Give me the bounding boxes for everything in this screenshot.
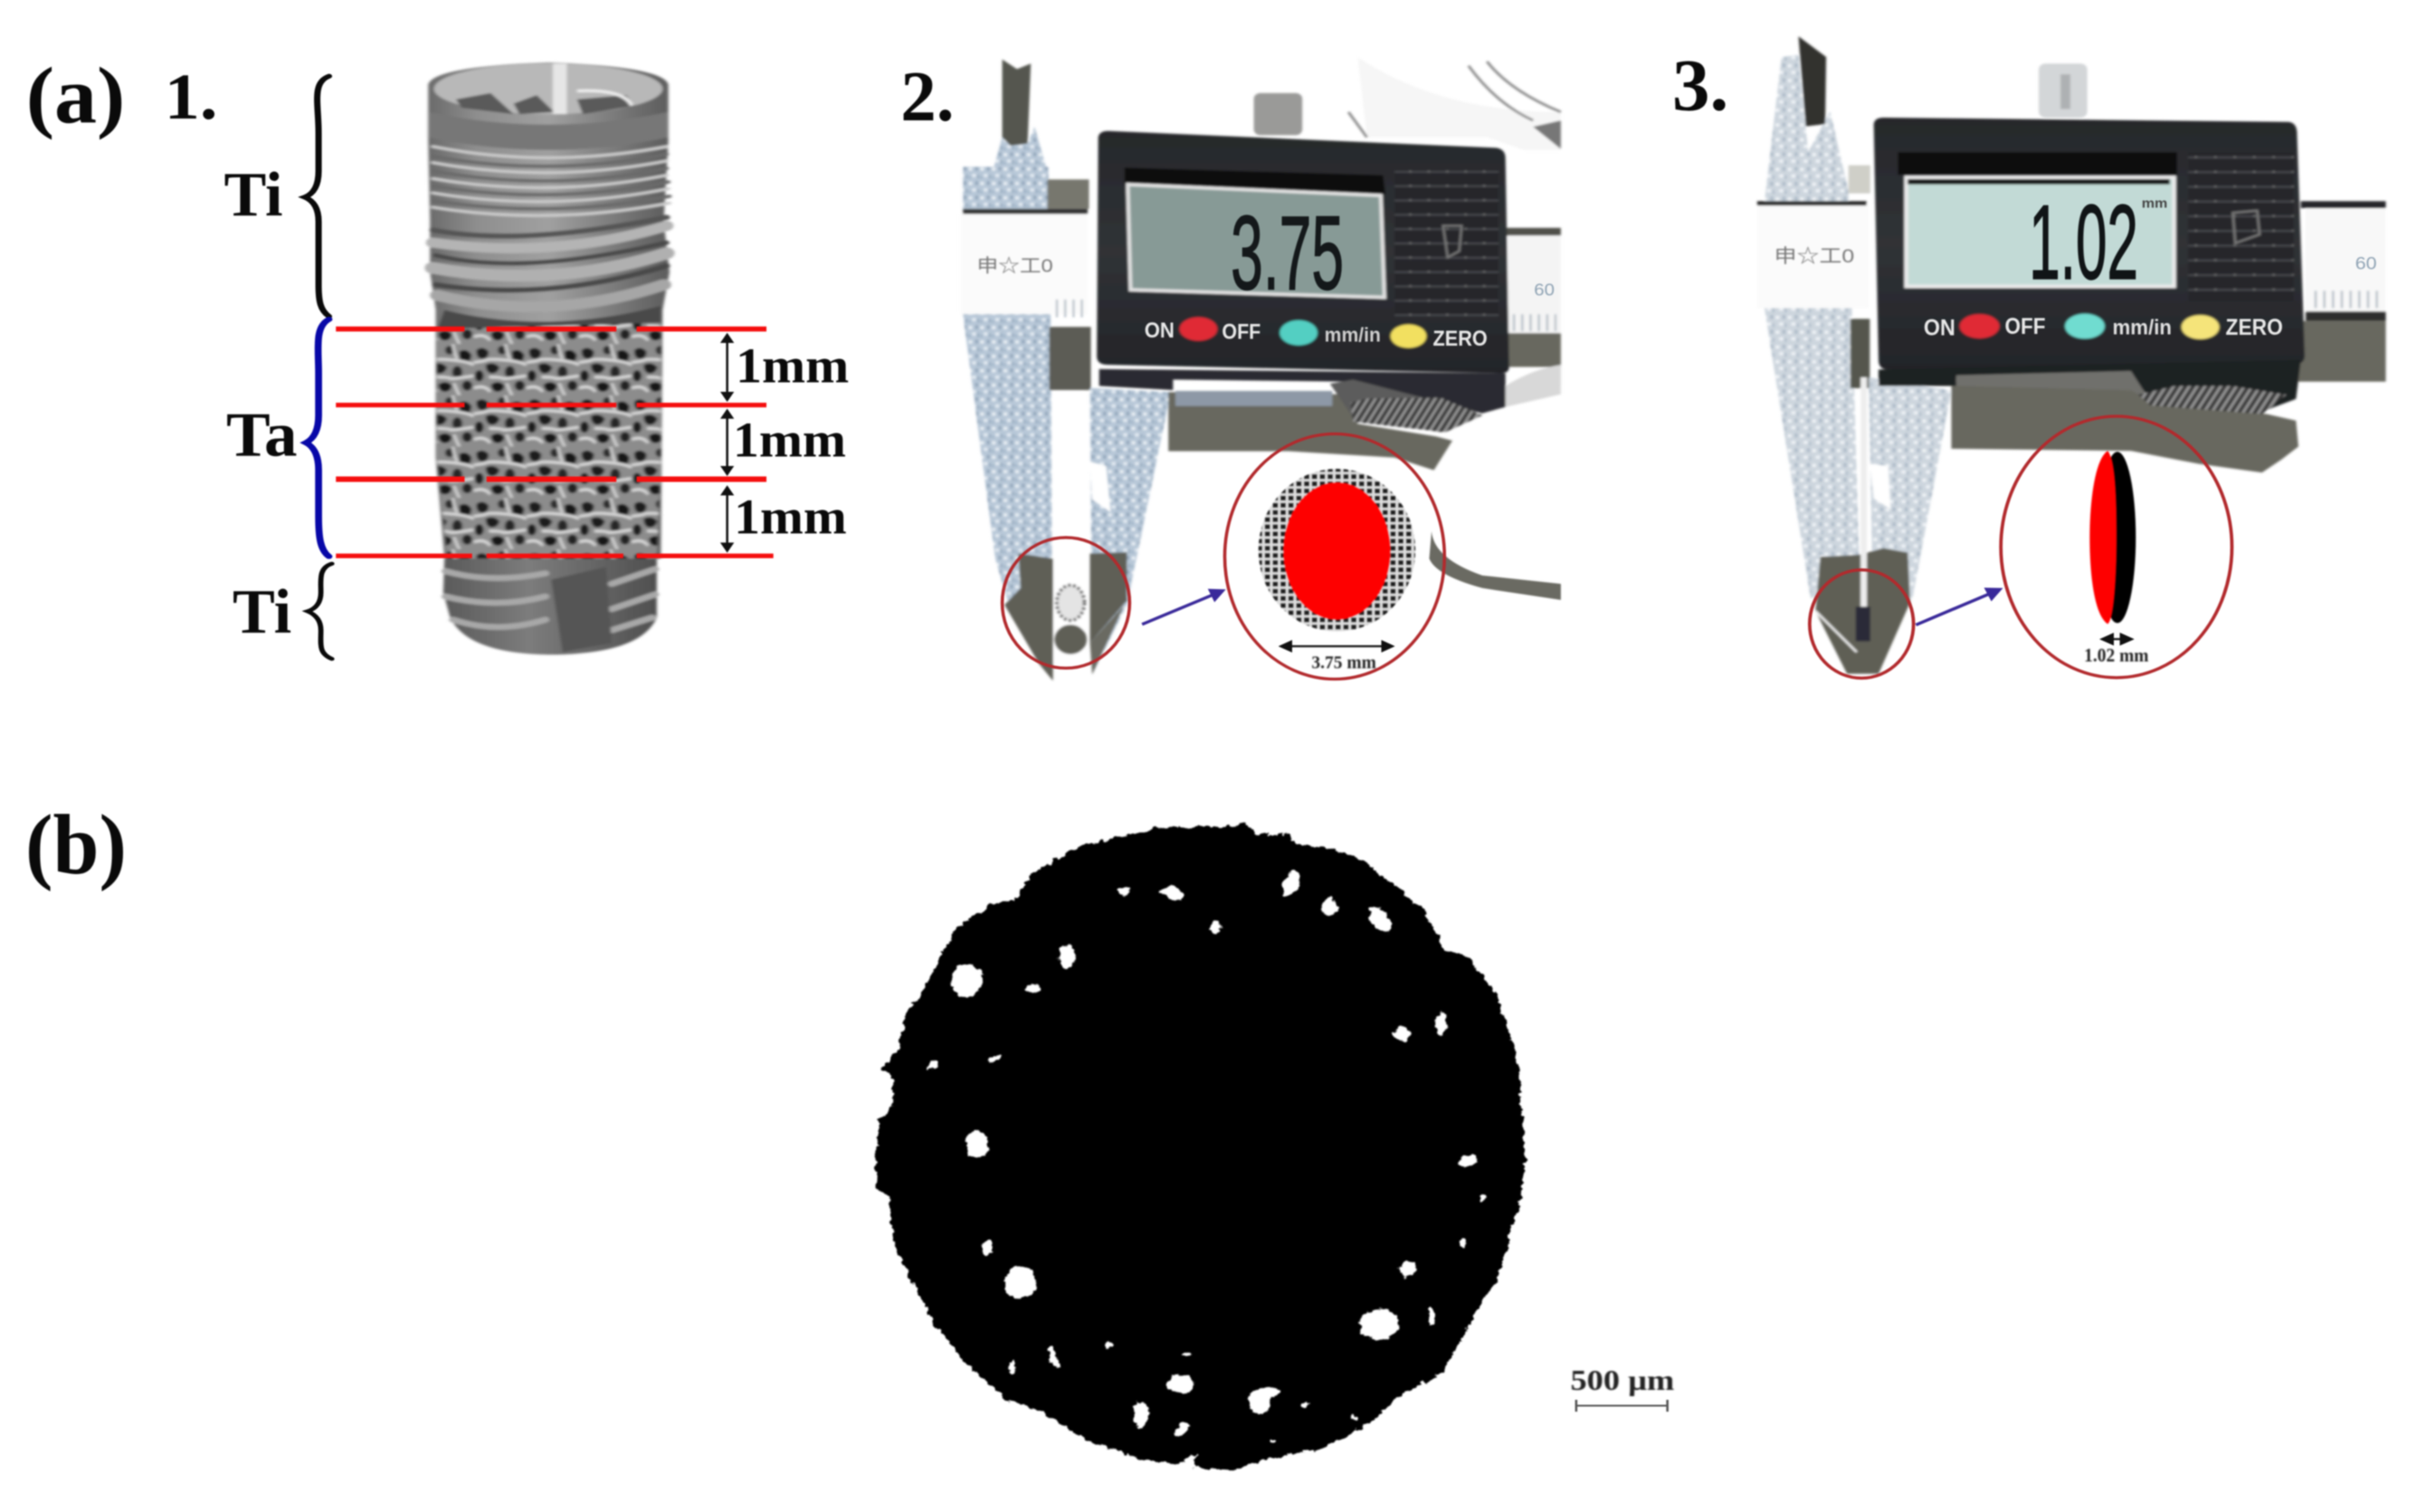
locating circle [1810, 570, 1914, 678]
label Ti lower: Ti [233, 576, 291, 647]
magnifier circle [2001, 416, 2232, 678]
unit mm on display: mm [2142, 196, 2167, 211]
dimension arrow 1.02 mm [2102, 637, 2132, 642]
magnified sample disc [1259, 469, 1415, 632]
sub-panel number 1: 1. [165, 61, 217, 133]
scale number 60: 60 [2355, 254, 2377, 273]
dimension label 1.02 mm: 1.02 mm [2084, 644, 2149, 665]
panel b: sample cross-section [875, 823, 1675, 1471]
scale marks: 申☆工0 [976, 256, 1053, 277]
display reading 3.75: 3.75 [1231, 194, 1344, 311]
button label OFF: OFF [1222, 319, 1261, 344]
panel a2: caliper reading 3.75 [900, 57, 1561, 680]
zoom arrow [1142, 591, 1223, 624]
label Ti upper: Ti [224, 159, 283, 230]
implant illustration [428, 62, 670, 655]
red section lines [336, 327, 774, 558]
dimension label 3.75 mm: 3.75 mm [1311, 651, 1376, 672]
panel letter (a): (a) [26, 51, 125, 140]
panel a3: caliper reading 1.02: 1.02 [2029, 184, 2138, 301]
scale bar label: 500 µm [1571, 1365, 1675, 1396]
panel a1: implant with sections [26, 51, 849, 659]
button label mm/in: mm/in [2113, 317, 2172, 339]
brace: upper Ti [305, 76, 329, 317]
panel a3: caliper reading 1.02 [1672, 36, 2386, 678]
dimension arrow 3.75 mm [1280, 644, 1393, 649]
label 1mm second: 1mm [733, 413, 846, 468]
button label ON: ON [1924, 315, 1955, 340]
scale bar [1576, 1400, 1668, 1412]
zoom arrow [1916, 589, 2000, 625]
magnified sample edge view [2089, 451, 2136, 624]
label 1mm third: 1mm [734, 490, 847, 545]
caliper photo [1757, 36, 2386, 674]
brace: Ta [306, 319, 329, 556]
scale marks: 申☆工0 [1774, 245, 1854, 267]
button label OFF: OFF [2004, 314, 2046, 339]
sub-panel number 2: 2. [900, 57, 954, 136]
scale number 60: 60 [1534, 281, 1555, 300]
locating circle [1003, 537, 1129, 668]
black sample silhouette [875, 823, 1526, 1471]
brace: lower Ti [308, 564, 332, 659]
button label mm/in: mm/in [1325, 324, 1381, 346]
sub-panel number 3: 3. [1672, 44, 1728, 126]
lower jaw strap [1429, 531, 1561, 600]
button label ZERO: ZERO [1433, 327, 1488, 351]
measurement arrows [726, 335, 729, 551]
button label ON: ON [1145, 319, 1175, 343]
panel letter (b): (b) [25, 798, 127, 892]
magnifier circle [1224, 434, 1444, 680]
caliper photo [961, 57, 1561, 680]
label Ta: Ta [226, 400, 297, 470]
button label ZERO: ZERO [2226, 315, 2283, 340]
label 1mm first: 1mm [736, 338, 849, 394]
white pores [926, 869, 1486, 1443]
